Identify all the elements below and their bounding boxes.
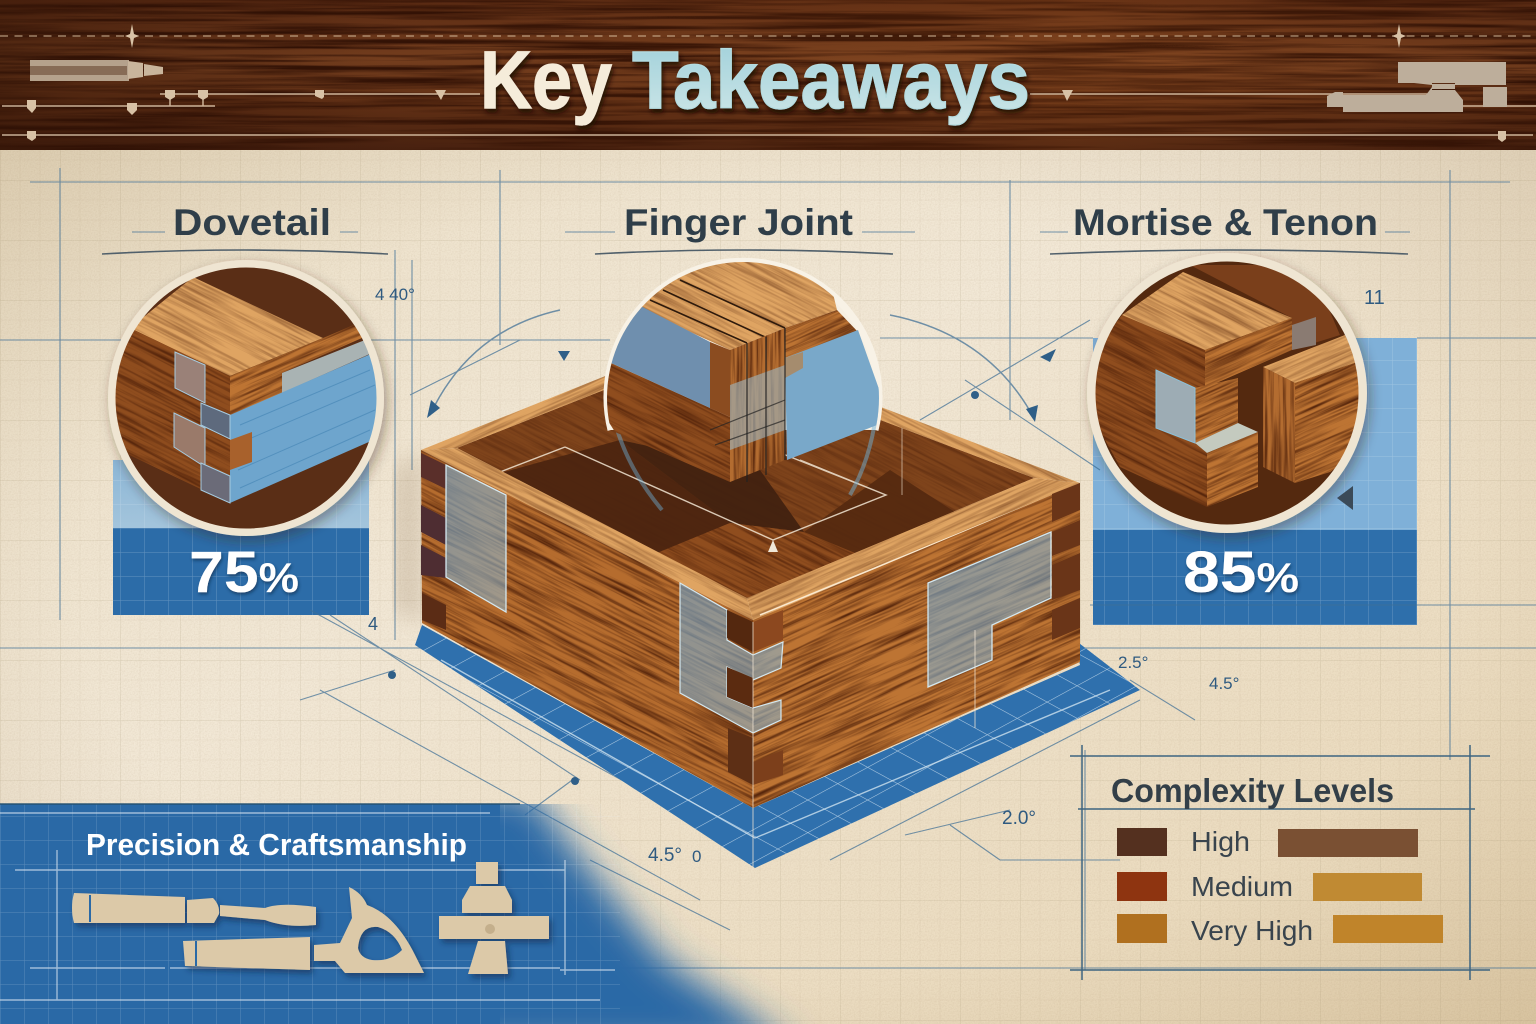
marker triangle [1337, 486, 1353, 510]
icon: plane tool [183, 887, 424, 973]
heading: Dovetail [102, 202, 388, 254]
dimension labels: 0 [692, 847, 701, 866]
box left face [421, 450, 753, 808]
dimension labels: 4.5° [1209, 674, 1239, 693]
wooden box [421, 338, 1080, 870]
legend row: very high: Very High [1191, 915, 1313, 946]
left joint blocks [421, 453, 446, 630]
panel: precision and craftsmanship [0, 790, 795, 1024]
header wood band [0, 0, 1536, 150]
legend row: high: High [1191, 826, 1250, 857]
icon: header pencil [30, 60, 163, 81]
glass panel: right side [928, 532, 1051, 687]
panel: dovetail blueprint block [113, 460, 369, 615]
dimension labels: 4 [368, 614, 378, 634]
detail circle: dovetail [100, 250, 400, 550]
heading: Dovetail: Dovetail [173, 202, 331, 243]
detail circle: mortise and tenon [1087, 253, 1370, 535]
heading: Finger Joint: Finger Joint [624, 202, 853, 243]
right joint blocks [1052, 483, 1080, 640]
dimension labels: 11 [1364, 287, 1385, 309]
legend row: high [1117, 826, 1418, 857]
legend row: very high [1117, 914, 1443, 946]
legend title: Complexity Levels [1111, 772, 1394, 809]
corner dovetail blocks [727, 610, 783, 785]
heading: Mortise & Tenon: Mortise & Tenon [1073, 202, 1378, 243]
dimension labels [368, 285, 1385, 866]
title: Takeaways [632, 35, 1030, 126]
glass panel: front corner [680, 583, 783, 733]
heading: Mortise & Tenon [1050, 202, 1408, 254]
panel heading: Precision & Craftsmanship [86, 827, 467, 862]
title: Key [480, 35, 612, 126]
legend row: medium: Medium [1191, 871, 1293, 902]
panel: mortise blueprint block [1093, 338, 1417, 625]
box interior [457, 352, 1034, 598]
stat: 85%: 85% [1183, 540, 1299, 605]
legend row: medium [1117, 871, 1422, 902]
title [480, 35, 1030, 126]
arrow markers on dimension lines [388, 349, 1056, 785]
icon: header tool [1327, 62, 1507, 112]
soft shadow beside box [395, 450, 422, 625]
blue floor sheet [415, 625, 1140, 868]
dimension labels: 4.5° [648, 845, 682, 866]
dimension labels: 2.5° [1118, 653, 1148, 672]
dimension labels: 4 40° [375, 285, 415, 304]
box top rim [421, 338, 1080, 620]
box right face [753, 483, 1080, 808]
heading: Finger Joint [595, 202, 893, 254]
detail circle: finger joint [603, 258, 882, 512]
dimension labels: 2.0° [1002, 808, 1036, 829]
icon: upper chisel [72, 893, 316, 926]
glass panel: left side [446, 465, 506, 612]
icon: marking gauge [439, 862, 549, 974]
legend: complexity levels [1070, 745, 1490, 980]
stat: 75%: 75% [189, 540, 299, 605]
